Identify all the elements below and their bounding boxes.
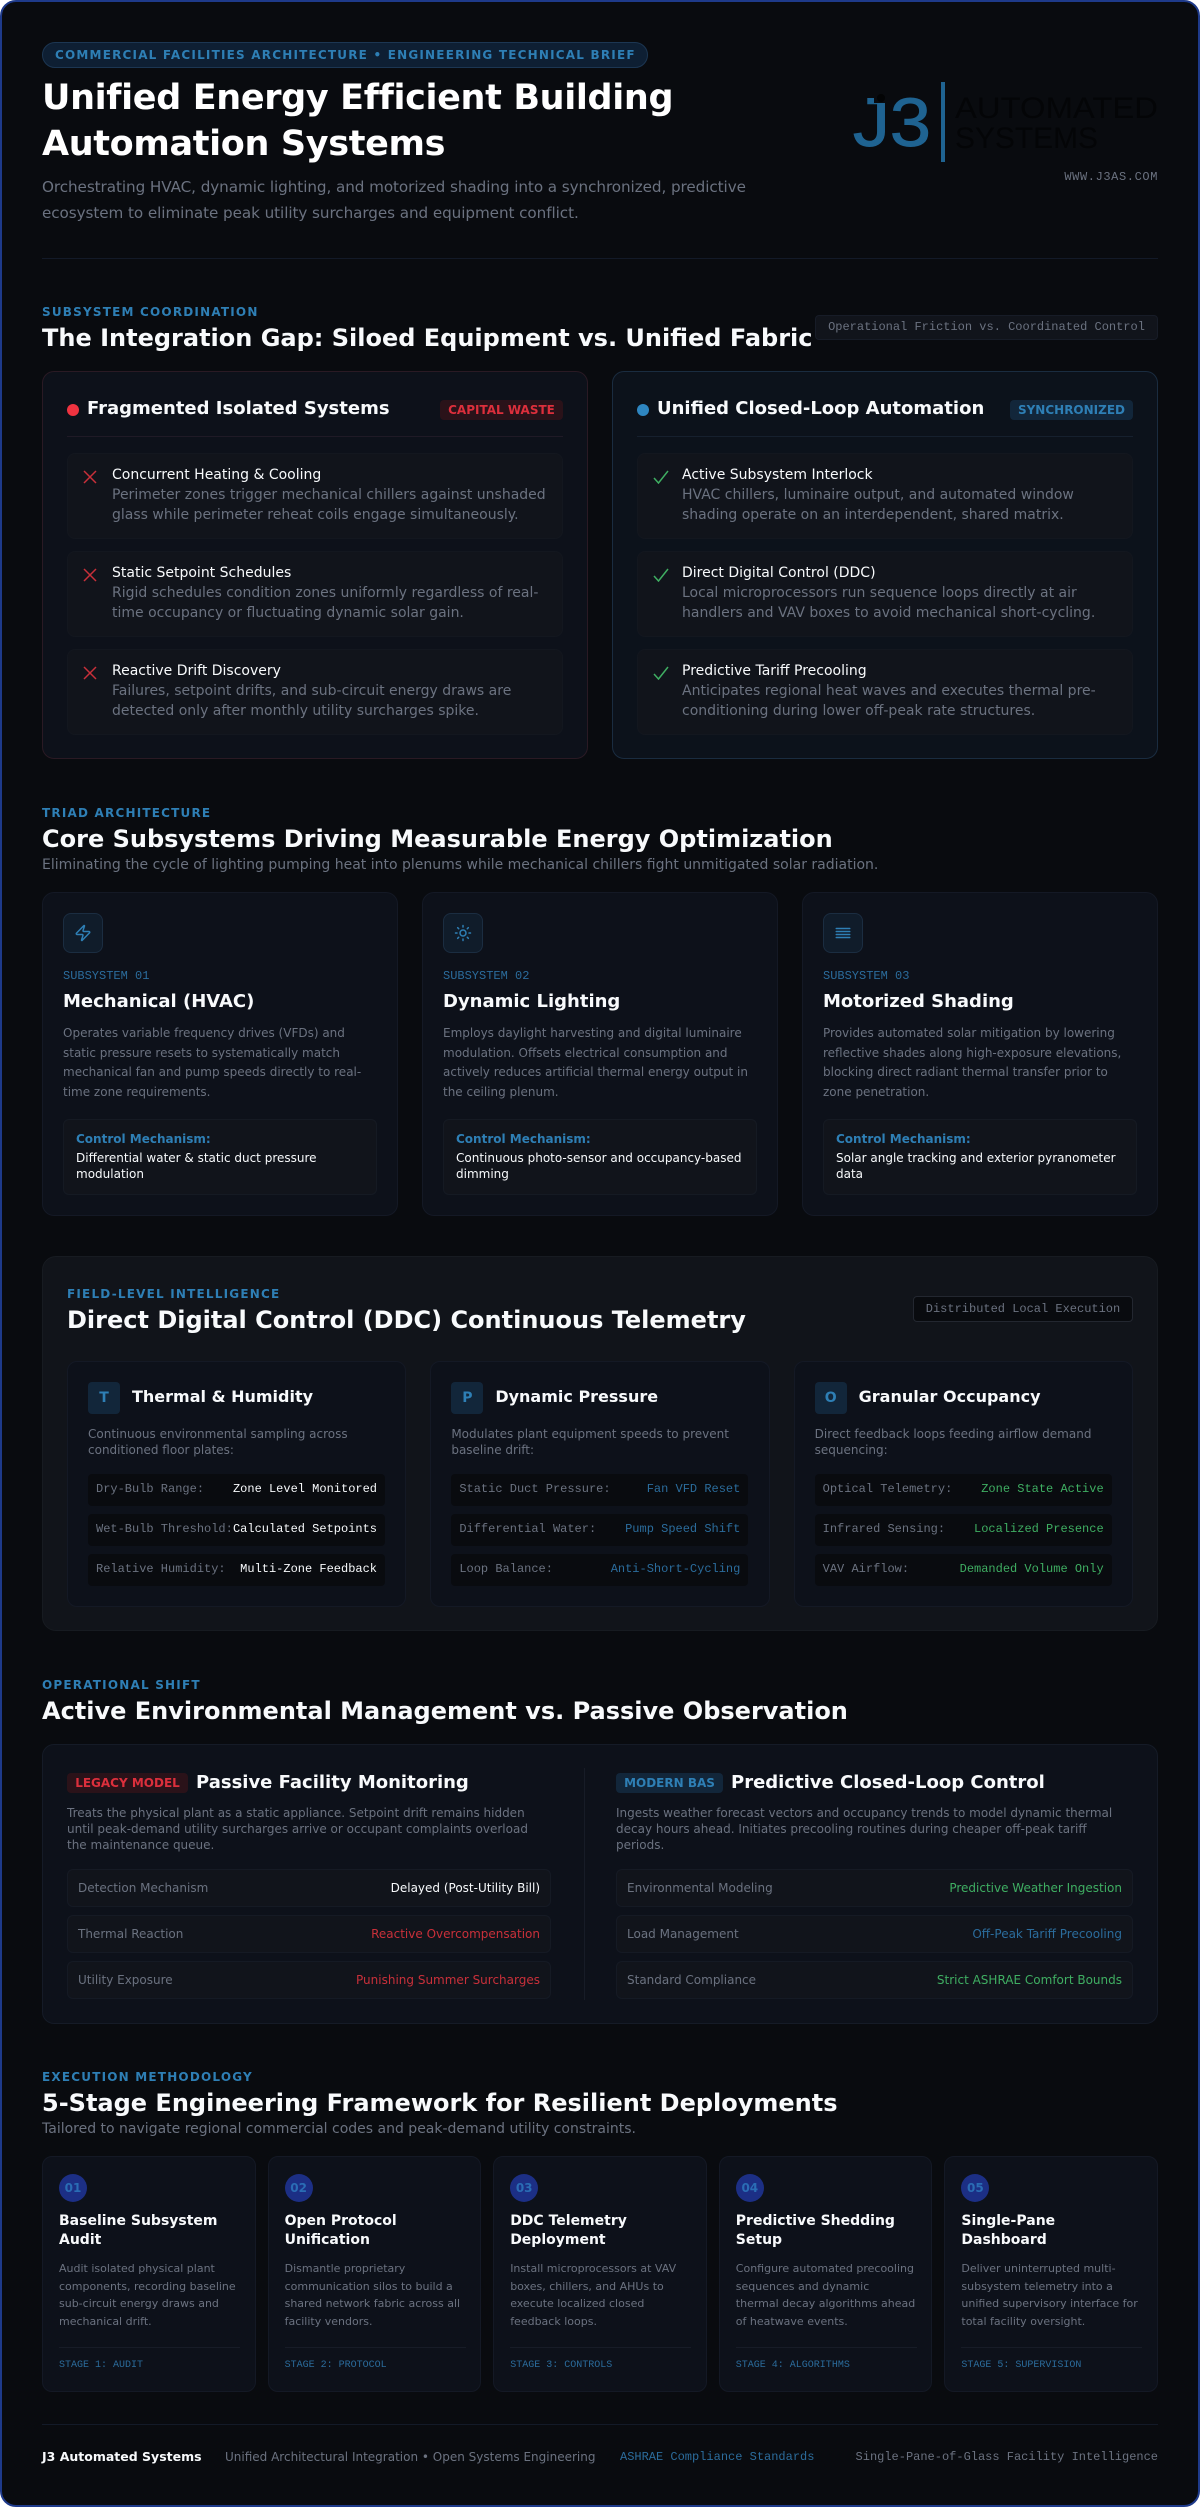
title: passive facility monitoring: Passive Facility Monitoring <box>196 1772 469 1793</box>
row: differential water: Pump Speed Shift <box>625 1522 740 1536</box>
stage title: Open Protocol <box>285 2213 397 2229</box>
stage description: Install microprocessors at VAV <box>510 2262 676 2275</box>
stage title: Deployment <box>510 2232 606 2248</box>
card description: mechanical fan and pump speeds directly to real- <box>63 1065 361 1079</box>
stage description <box>736 2262 915 2328</box>
row: infrared sensing: Localized Presence <box>974 1522 1104 1536</box>
label: SUBSYSTEM 02 <box>443 969 529 983</box>
card title: Thermal & Humidity <box>132 1387 313 1406</box>
item: reactive drift discovery: detected only after monthly utility surcharges spike. <box>112 703 479 719</box>
card description: zone penetration. <box>823 1084 929 1098</box>
stage description: Deliver uninterrupted multi- <box>961 2262 1116 2275</box>
tag: distributed local execution <box>913 1296 1133 1322</box>
card: mechanical hvac <box>42 892 398 1216</box>
badge: capital waste: CAPITAL WASTE <box>448 403 555 417</box>
stage description: Dismantle proprietary <box>285 2262 405 2275</box>
card description <box>88 1427 348 1457</box>
item: static setpoint schedules: Rigid schedules condition zones uniformly regardless of real- <box>112 585 538 601</box>
stage title <box>510 2213 627 2248</box>
badge: legacy model: LEGACY MODEL <box>75 1776 180 1790</box>
card description: Operates variable frequency drives (VFDs) and <box>63 1026 345 1040</box>
stage label: STAGE 1: AUDIT <box>59 2360 143 2371</box>
panel: fragmented isolated systems <box>42 371 588 759</box>
item: active subsystem interlock: HVAC chillers, luminaire output, and automated window <box>682 487 1074 503</box>
stage description: Configure automated precooling <box>736 2262 914 2275</box>
stage description <box>284 2262 460 2328</box>
control mechanism box: Solar angle tracking and exterior pyranometer <box>836 1151 1116 1165</box>
row: wet-bulb <box>88 1514 385 1546</box>
card description <box>451 1427 729 1457</box>
row: wet-bulb: Wet-Bulb Threshold: <box>96 1522 233 1536</box>
item: predictive tariff precooling: Anticipates regional heat waves and executes thermal pre- <box>682 683 1096 699</box>
row: load management: Off-Peak Tariff Precooling <box>972 1927 1122 1941</box>
card description: Continuous environmental sampling across <box>88 1427 348 1441</box>
panel title: Fragmented Isolated Systems <box>87 398 390 419</box>
tag: operational friction <box>815 315 1158 340</box>
icon letter O: O <box>825 1390 837 1406</box>
header pill <box>42 42 648 68</box>
panel: comparison <box>42 1744 1158 2024</box>
logo: J3 Automated Systems: J3 <box>853 84 931 161</box>
card description: Modulates plant equipment speeds to prevent <box>451 1427 729 1441</box>
item: direct digital control: Local microprocessors run sequence loops directly at air <box>682 585 1077 601</box>
panel: unified closed-loop automation <box>612 371 1158 759</box>
row: detection mechanism: Detection Mechanism <box>78 1881 208 1895</box>
stage description: sequences and dynamic <box>736 2280 869 2293</box>
card description: the ceiling plenum. <box>443 1084 559 1098</box>
control mechanism box <box>443 1119 757 1195</box>
stage title: Unification <box>285 2232 370 2248</box>
row: detection mechanism <box>67 1869 551 1907</box>
item: reactive drift discovery: Reactive Drift Discovery <box>112 663 281 679</box>
subtitle: Orchestrating HVAC, dynamic lighting, and motorized shading into a synchronized, predictive <box>42 178 746 196</box>
stage title: Predictive Shedding <box>736 2213 895 2229</box>
stage description: unified supervisory interface for <box>961 2297 1138 2310</box>
card description: time zone requirements. <box>63 1084 210 1098</box>
badge: modern bas: MODERN BAS <box>624 1776 715 1790</box>
card description: reflective shades along high-exposure elevations, <box>823 1046 1121 1060</box>
description: passive: the maintenance queue. <box>67 1838 214 1852</box>
row: loop balance: Anti-Short-Cycling <box>611 1562 740 1576</box>
card: motorized shading <box>802 892 1158 1216</box>
row: utility exposure: Punishing Summer Surcharges <box>356 1973 540 1987</box>
row: vav airflow: VAV Airflow: <box>823 1562 909 1576</box>
badge: synchronized <box>1010 400 1133 420</box>
item: predictive tariff precooling <box>637 649 1133 735</box>
row: dry-bulb <box>88 1474 385 1506</box>
row: optical telemetry: Optical Telemetry: <box>823 1482 952 1496</box>
stage description <box>59 2262 236 2328</box>
row: wet-bulb: Calculated Setpoints <box>233 1522 377 1536</box>
card title: Motorized Shading <box>823 991 1014 1012</box>
stage number: 03 <box>516 2181 533 2195</box>
subtitle <box>42 178 746 222</box>
item: direct digital control: handlers and VAV boxes to avoid mechanical short-cycling. <box>682 605 1095 621</box>
description: predictive: Ingests weather forecast vectors and occupancy trends to model dynamic thermal <box>616 1806 1112 1820</box>
stage number: 01 <box>65 2181 81 2195</box>
stage description: Audit isolated physical plant <box>59 2262 215 2275</box>
stage description: mechanical drift. <box>59 2315 152 2328</box>
row: standard compliance <box>616 1961 1133 1999</box>
stage title: Dashboard <box>961 2232 1047 2248</box>
item: active subsystem interlock: Active Subsystem Interlock <box>682 467 873 483</box>
card description: actively reduces artificial thermal energy output in <box>443 1065 748 1079</box>
item: static setpoint schedules: Static Setpoint Schedules <box>112 565 291 581</box>
stage number <box>961 2174 989 2202</box>
card description: Employs daylight harvesting and digital luminaire <box>443 1026 742 1040</box>
row: load management <box>616 1915 1133 1953</box>
control mechanism box: Differential water & static duct pressure <box>76 1151 317 1165</box>
row: infrared sensing: Infrared Sensing: <box>823 1522 945 1536</box>
card description: static pressure resets to systematically match <box>63 1046 340 1060</box>
item: reactive drift discovery: Failures, setpoint drifts, and sub-circuit energy draws are <box>112 683 511 699</box>
logo: J3 Automated Systems: AUTOMATED <box>955 92 1158 125</box>
icon: sun <box>443 913 483 953</box>
title: Automation Systems <box>42 124 445 164</box>
stage title <box>961 2213 1055 2248</box>
row: optical telemetry <box>815 1474 1112 1506</box>
section eyebrow: execution methodology: EXECUTION METHODOLOGY <box>42 2070 253 2084</box>
card title: Granular Occupancy <box>859 1387 1041 1406</box>
control mechanism box: Continuous photo-sensor and occupancy-based <box>456 1151 742 1165</box>
item: active subsystem interlock <box>637 453 1133 539</box>
footer tagline: Unified Architectural Integration • Open Systems Engineering <box>225 2450 595 2464</box>
logo: J3 Automated Systems <box>853 82 1158 162</box>
stage number <box>510 2174 538 2202</box>
row: environmental modeling: Predictive Weather Ingestion <box>949 1881 1122 1895</box>
stage number <box>285 2174 313 2202</box>
stage description: execute localized closed <box>510 2297 644 2310</box>
stage label: STAGE 5: SUPERVISION <box>961 2360 1081 2371</box>
item: direct digital control <box>637 551 1133 637</box>
section eyebrow: operational shift: OPERATIONAL SHIFT <box>42 1678 201 1692</box>
stage description: thermal decay algorithms ahead <box>736 2297 915 2310</box>
stage card 5 <box>944 2156 1158 2392</box>
stage title: Baseline Subsystem <box>59 2213 218 2229</box>
stage title: Single-Pane <box>961 2213 1055 2229</box>
stage title <box>736 2213 895 2248</box>
stage number <box>59 2174 87 2202</box>
row: environmental modeling <box>616 1869 1133 1907</box>
item: concurrent heating and cooling: Perimeter zones trigger mechanical chillers against unshaded <box>112 487 546 503</box>
card description: modulation. Offsets electrical consumption and <box>443 1046 728 1060</box>
stage title: Audit <box>59 2232 101 2248</box>
control mechanism box: dimming <box>456 1167 509 1181</box>
telemetry card: granular occupancy <box>794 1361 1133 1607</box>
section heading: 5-stage framework: 5-Stage Engineering Framework for Resilient Deployments <box>42 2089 838 2117</box>
card description: Direct feedback loops feeding airflow demand <box>815 1427 1091 1441</box>
row: loop balance <box>451 1554 748 1586</box>
card description: Provides automated solar mitigation by lowering <box>823 1026 1115 1040</box>
stage description: boxes, chillers, and AHUs to <box>510 2280 664 2293</box>
description: passive: Treats the physical plant as a static appliance. Setpoint drift remains hidden <box>67 1806 525 1820</box>
control mechanism box: Control Mechanism: <box>76 1132 211 1146</box>
row: humidity: Relative Humidity: <box>96 1562 226 1576</box>
item: concurrent heating and cooling: glass while perimeter reheat coils engage simultaneously. <box>112 507 519 523</box>
item: direct digital control: Direct Digital Control (DDC) <box>682 565 876 581</box>
footer brand: J3 Automated Systems <box>42 2449 202 2464</box>
badge: synchronized: SYNCHRONIZED <box>1018 403 1125 417</box>
card title: Dynamic Pressure <box>495 1387 658 1406</box>
item: predictive tariff precooling: conditioning during lower off-peak rate structures. <box>682 703 1035 719</box>
row: detection mechanism: Delayed (Post-Utility Bill) <box>391 1881 540 1895</box>
row: thermal reaction: Thermal Reaction <box>78 1927 183 1941</box>
section eyebrow: triad architecture: TRIAD ARCHITECTURE <box>42 806 211 820</box>
stage description: feedback loops. <box>510 2315 597 2328</box>
icon letter T <box>88 1382 120 1414</box>
row: loop balance: Loop Balance: <box>459 1562 553 1576</box>
stage description: subsystem telemetry into a <box>961 2280 1113 2293</box>
card title: Mechanical (HVAC) <box>63 991 254 1012</box>
section heading: integration gap: The Integration Gap: Siloed Equipment vs. Unified Fabric <box>42 324 812 352</box>
label: SUBSYSTEM 01 <box>63 969 149 983</box>
website url: WWW.J3AS.COM <box>1064 170 1158 184</box>
description: passive <box>67 1806 528 1852</box>
stage card 2 <box>268 2156 481 2392</box>
icon letter O <box>815 1382 847 1414</box>
stage description: shared network fabric across all <box>285 2297 460 2310</box>
card description <box>815 1427 1091 1457</box>
section eyebrow: subsystem coordination: SUBSYSTEM COORDINATION <box>42 305 259 319</box>
stage number <box>736 2174 764 2202</box>
row: static duct: Fan VFD Reset <box>647 1482 740 1496</box>
tag: distributed local execution: Distributed Local Execution <box>926 1302 1120 1316</box>
section heading: active vs passive: Active Environmental Management vs. Passive Observation <box>42 1697 848 1725</box>
row: optical telemetry: Zone State Active <box>981 1482 1104 1496</box>
control mechanism box: modulation <box>76 1167 144 1181</box>
item: concurrent heating and cooling <box>67 453 563 539</box>
section heading: ddc telemetry: Direct Digital Control (DDC) Continuous Telemetry <box>67 1306 746 1334</box>
badge: capital waste <box>440 400 563 420</box>
stage card 4 <box>719 2156 932 2392</box>
item: active subsystem interlock: shading operate on an interdependent, shared matrix. <box>682 507 1064 523</box>
icon letter P <box>451 1382 483 1414</box>
card description <box>443 1026 748 1098</box>
item: reactive drift discovery <box>67 649 563 735</box>
title <box>42 78 673 164</box>
row: thermal reaction: Reactive Overcompensation <box>371 1927 540 1941</box>
row: load management: Load Management <box>627 1927 739 1941</box>
item: static setpoint schedules <box>67 551 563 637</box>
description: predictive <box>616 1806 1112 1852</box>
row: dry-bulb: Zone Level Monitored <box>233 1482 377 1496</box>
stage description: components, recording baseline <box>59 2280 236 2293</box>
title: Unified Energy Efficient Building <box>42 78 673 118</box>
stage title: Setup <box>736 2232 782 2248</box>
icon letter T: T <box>99 1390 109 1406</box>
stage description <box>961 2262 1138 2328</box>
stage description <box>510 2262 676 2328</box>
section heading: core subsystems: Core Subsystems Driving Measurable Energy Optimization <box>42 825 833 853</box>
stage title <box>59 2213 218 2248</box>
stage label: STAGE 2: PROTOCOL <box>285 2360 387 2371</box>
card title: Dynamic Lighting <box>443 991 620 1012</box>
stage label: STAGE 4: ALGORITHMS <box>736 2360 850 2371</box>
stage number: 04 <box>741 2181 758 2195</box>
stage description: of heatwave events. <box>736 2315 848 2328</box>
control mechanism box: data <box>836 1167 863 1181</box>
stage description: total facility oversight. <box>961 2315 1085 2328</box>
footer compliance: ASHRAE Compliance Standards <box>620 2450 814 2464</box>
stage description: facility vendors. <box>285 2315 372 2328</box>
row: utility exposure <box>67 1961 551 1999</box>
telemetry card: thermal and humidity <box>67 1361 406 1607</box>
icon: shade lines <box>823 913 863 953</box>
badge: legacy model <box>67 1773 188 1793</box>
item: concurrent heating and cooling: Concurrent Heating & Cooling <box>112 467 321 483</box>
description: predictive: periods. <box>616 1838 664 1852</box>
section eyebrow: field-level intelligence: FIELD-LEVEL INTELLIGENCE <box>67 1287 280 1301</box>
tag: operational friction: Operational Friction vs. Coordinated Control <box>828 320 1145 334</box>
section subheading: core subsystems: Eliminating the cycle of lighting pumping heat into plenums while mechanical chillers fight unmitigated solar radiation. <box>42 857 878 873</box>
panel: direct digital control telemetry <box>42 1256 1158 1631</box>
control mechanism box: Control Mechanism: <box>836 1132 971 1146</box>
subtitle: ecosystem to eliminate peak utility surcharges and equipment conflict. <box>42 204 579 222</box>
row: dry-bulb: Dry-Bulb Range: <box>96 1482 204 1496</box>
card: dynamic lighting <box>422 892 778 1216</box>
card description: baseline drift: <box>451 1443 534 1457</box>
logo: J3 Automated Systems: SYSTEMS <box>955 122 1098 155</box>
panel title: Unified Closed-Loop Automation <box>657 398 984 419</box>
title: predictive closed-loop control: Predictive Closed-Loop Control <box>731 1772 1045 1793</box>
row: environmental modeling: Environmental Modeling <box>627 1881 773 1895</box>
row: vav airflow <box>815 1554 1112 1586</box>
row: humidity: Multi-Zone Feedback <box>240 1562 377 1576</box>
row: humidity <box>88 1554 385 1586</box>
control mechanism box <box>63 1119 377 1195</box>
stage title: DDC Telemetry <box>510 2213 627 2229</box>
row: static duct <box>451 1474 748 1506</box>
card description: blocking direct radiant thermal transfer prior to <box>823 1065 1108 1079</box>
stage card 1 <box>42 2156 256 2392</box>
description: passive: until peak-demand utility surcharges arrive or occupant complaints overload <box>67 1822 528 1836</box>
stage card 3 <box>493 2156 707 2392</box>
status dot blue <box>637 404 649 416</box>
row: static duct: Static Duct Pressure: <box>459 1482 611 1496</box>
control mechanism box: Control Mechanism: <box>456 1132 591 1146</box>
row: differential water <box>451 1514 748 1546</box>
control mechanism box <box>823 1119 1137 1195</box>
stage title <box>285 2213 397 2248</box>
card description <box>823 1026 1121 1098</box>
badge: modern bas <box>616 1773 723 1793</box>
card description: sequencing: <box>815 1443 888 1457</box>
row: standard compliance: Standard Compliance <box>627 1973 756 1987</box>
item: predictive tariff precooling: Predictive Tariff Precooling <box>682 663 867 679</box>
icon: bolt <box>63 913 103 953</box>
stage number: 02 <box>290 2181 307 2195</box>
stage description: sub-circuit energy draws and <box>59 2297 219 2310</box>
label: SUBSYSTEM 03 <box>823 969 909 983</box>
row: vav airflow: Demanded Volume Only <box>960 1562 1104 1576</box>
row: thermal reaction <box>67 1915 551 1953</box>
description: predictive: decay hours ahead. Initiates precooling routines during cheaper off-peak tariff <box>616 1822 1087 1836</box>
card description: conditioned floor plates: <box>88 1443 234 1457</box>
row: standard compliance: Strict ASHRAE Comfort Bounds <box>937 1973 1122 1987</box>
status dot red <box>67 404 79 416</box>
row: differential water: Differential Water: <box>459 1522 596 1536</box>
section subheading: framework: Tailored to navigate regional commercial codes and peak-demand utility constraints. <box>42 2121 636 2137</box>
icon letter P: P <box>462 1390 472 1406</box>
stage number: 05 <box>967 2181 984 2195</box>
stage description: communication silos to build a <box>285 2280 453 2293</box>
row: infrared sensing <box>815 1514 1112 1546</box>
footer intelligence: Single-Pane-of-Glass Facility Intelligence <box>856 2450 1158 2464</box>
card description <box>63 1026 361 1098</box>
stage label: STAGE 3: CONTROLS <box>510 2360 612 2371</box>
item: static setpoint schedules: time occupancy or fluctuating dynamic solar gain. <box>112 605 464 621</box>
header pill: COMMERCIAL FACILITIES ARCHITECTURE • ENGINEERING TECHNICAL BRIEF <box>55 48 636 62</box>
row: utility exposure: Utility Exposure <box>78 1973 173 1987</box>
telemetry card: dynamic pressure <box>430 1361 770 1607</box>
